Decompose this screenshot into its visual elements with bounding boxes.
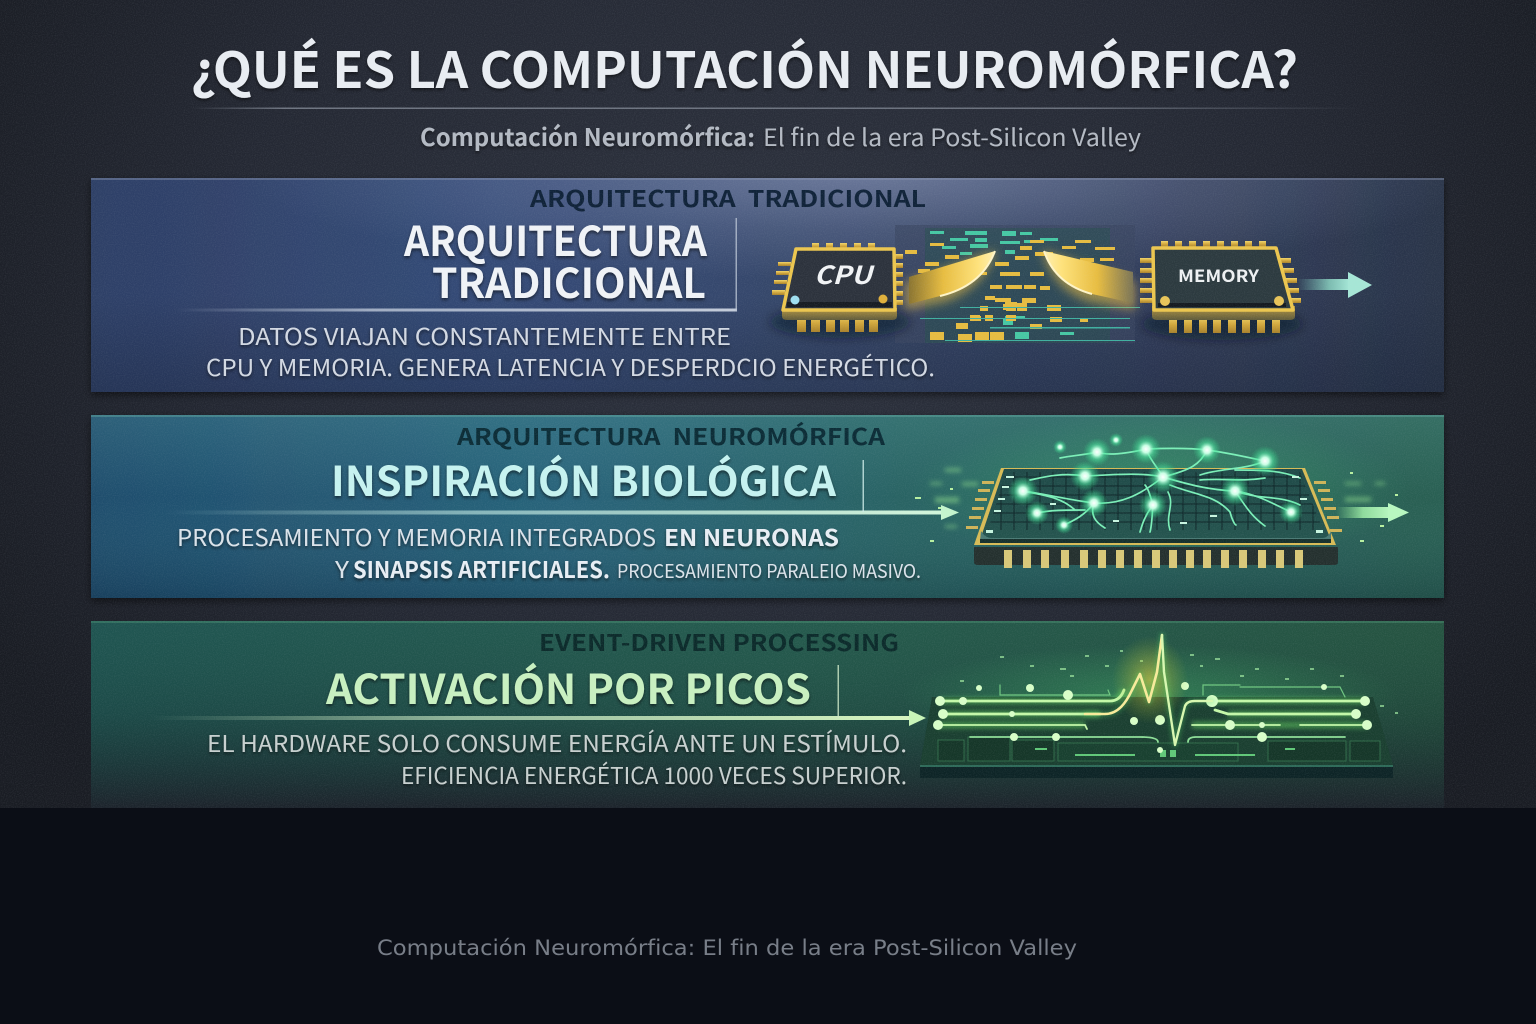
- subtitle: El fin de la era Post-Silicon Valley: [763, 118, 1142, 153]
- description: PROCESAMIENTO PARALEIO MASIVO.: [617, 557, 921, 584]
- memory label: MEMORY: [1178, 262, 1259, 287]
- curved data channels: [905, 250, 1135, 310]
- icon: CPU chip: [770, 243, 910, 338]
- description: CPU Y MEMORIA. GENERA LATENCIA Y DESPERDCIO ENERGÉTICO.: [206, 349, 935, 383]
- circuit blocks: [938, 737, 1380, 761]
- activation spike: [1085, 635, 1212, 745]
- description: DATOS VIAJAN CONSTANTEMENTE ENTRE: [238, 318, 731, 352]
- description: PROCESAMIENTO Y MEMORIA INTEGRADOS: [177, 519, 656, 553]
- description: SINAPSIS ARTIFICIALES.: [353, 551, 610, 585]
- panel: arquitectura tradicional: [91, 178, 1444, 392]
- panel: event-driven processing: [91, 621, 1444, 808]
- arrow: chip output: [1336, 503, 1409, 522]
- circuit traces: [938, 690, 1367, 725]
- heading: [403, 208, 708, 310]
- title: ¿QUÉ ES LA COMPUTACIÓN NEUROMÓRFICA?: [191, 31, 1298, 103]
- heading: TRADICIONAL: [432, 250, 706, 310]
- arrow: memory output: [1297, 272, 1372, 298]
- description: [177, 519, 921, 585]
- neural network traces: [1023, 448, 1300, 532]
- icon: memory chip: [1140, 241, 1302, 340]
- description: EFICIENCIA ENERGÉTICA 1000 VECES SUPERIOR.: [401, 757, 907, 791]
- description: Y: [334, 551, 350, 585]
- panel label: EVENT-DRIVEN PROCESSING: [539, 624, 899, 658]
- icon: spiking circuit board: [900, 635, 1400, 778]
- subtitle: [420, 118, 1142, 153]
- icon: neuromorphic chip: [910, 412, 1410, 568]
- heading: ACTIVACIÓN POR PICOS: [325, 656, 811, 716]
- arrow: heading rule: [165, 460, 959, 520]
- data transfer blocks: [895, 225, 1140, 343]
- panel label: ARQUITECTURA TRADICIONAL: [529, 180, 926, 214]
- panel label: ARQUITECTURA NEUROMÓRFICA: [456, 418, 885, 452]
- description: [207, 725, 907, 791]
- footer caption: Computación Neuromórfica: El fin de la era Post-Silicon Valley: [377, 936, 1077, 960]
- heading bracket: [175, 218, 737, 312]
- panel: arquitectura neuromórfica: [91, 412, 1444, 598]
- arrow: heading rule: [150, 665, 926, 726]
- description: EL HARDWARE SOLO CONSUME ENERGÍA ANTE UN ESTÍMULO.: [207, 725, 907, 759]
- description: EN NEURONAS: [664, 519, 839, 553]
- description: [206, 318, 935, 383]
- cpu label: CPU: [814, 256, 876, 292]
- heading: ARQUITECTURA: [403, 208, 708, 268]
- heading: INSPIRACIÓN BIOLÓGICA: [331, 448, 837, 508]
- subtitle: Computación Neuromórfica:: [420, 118, 755, 153]
